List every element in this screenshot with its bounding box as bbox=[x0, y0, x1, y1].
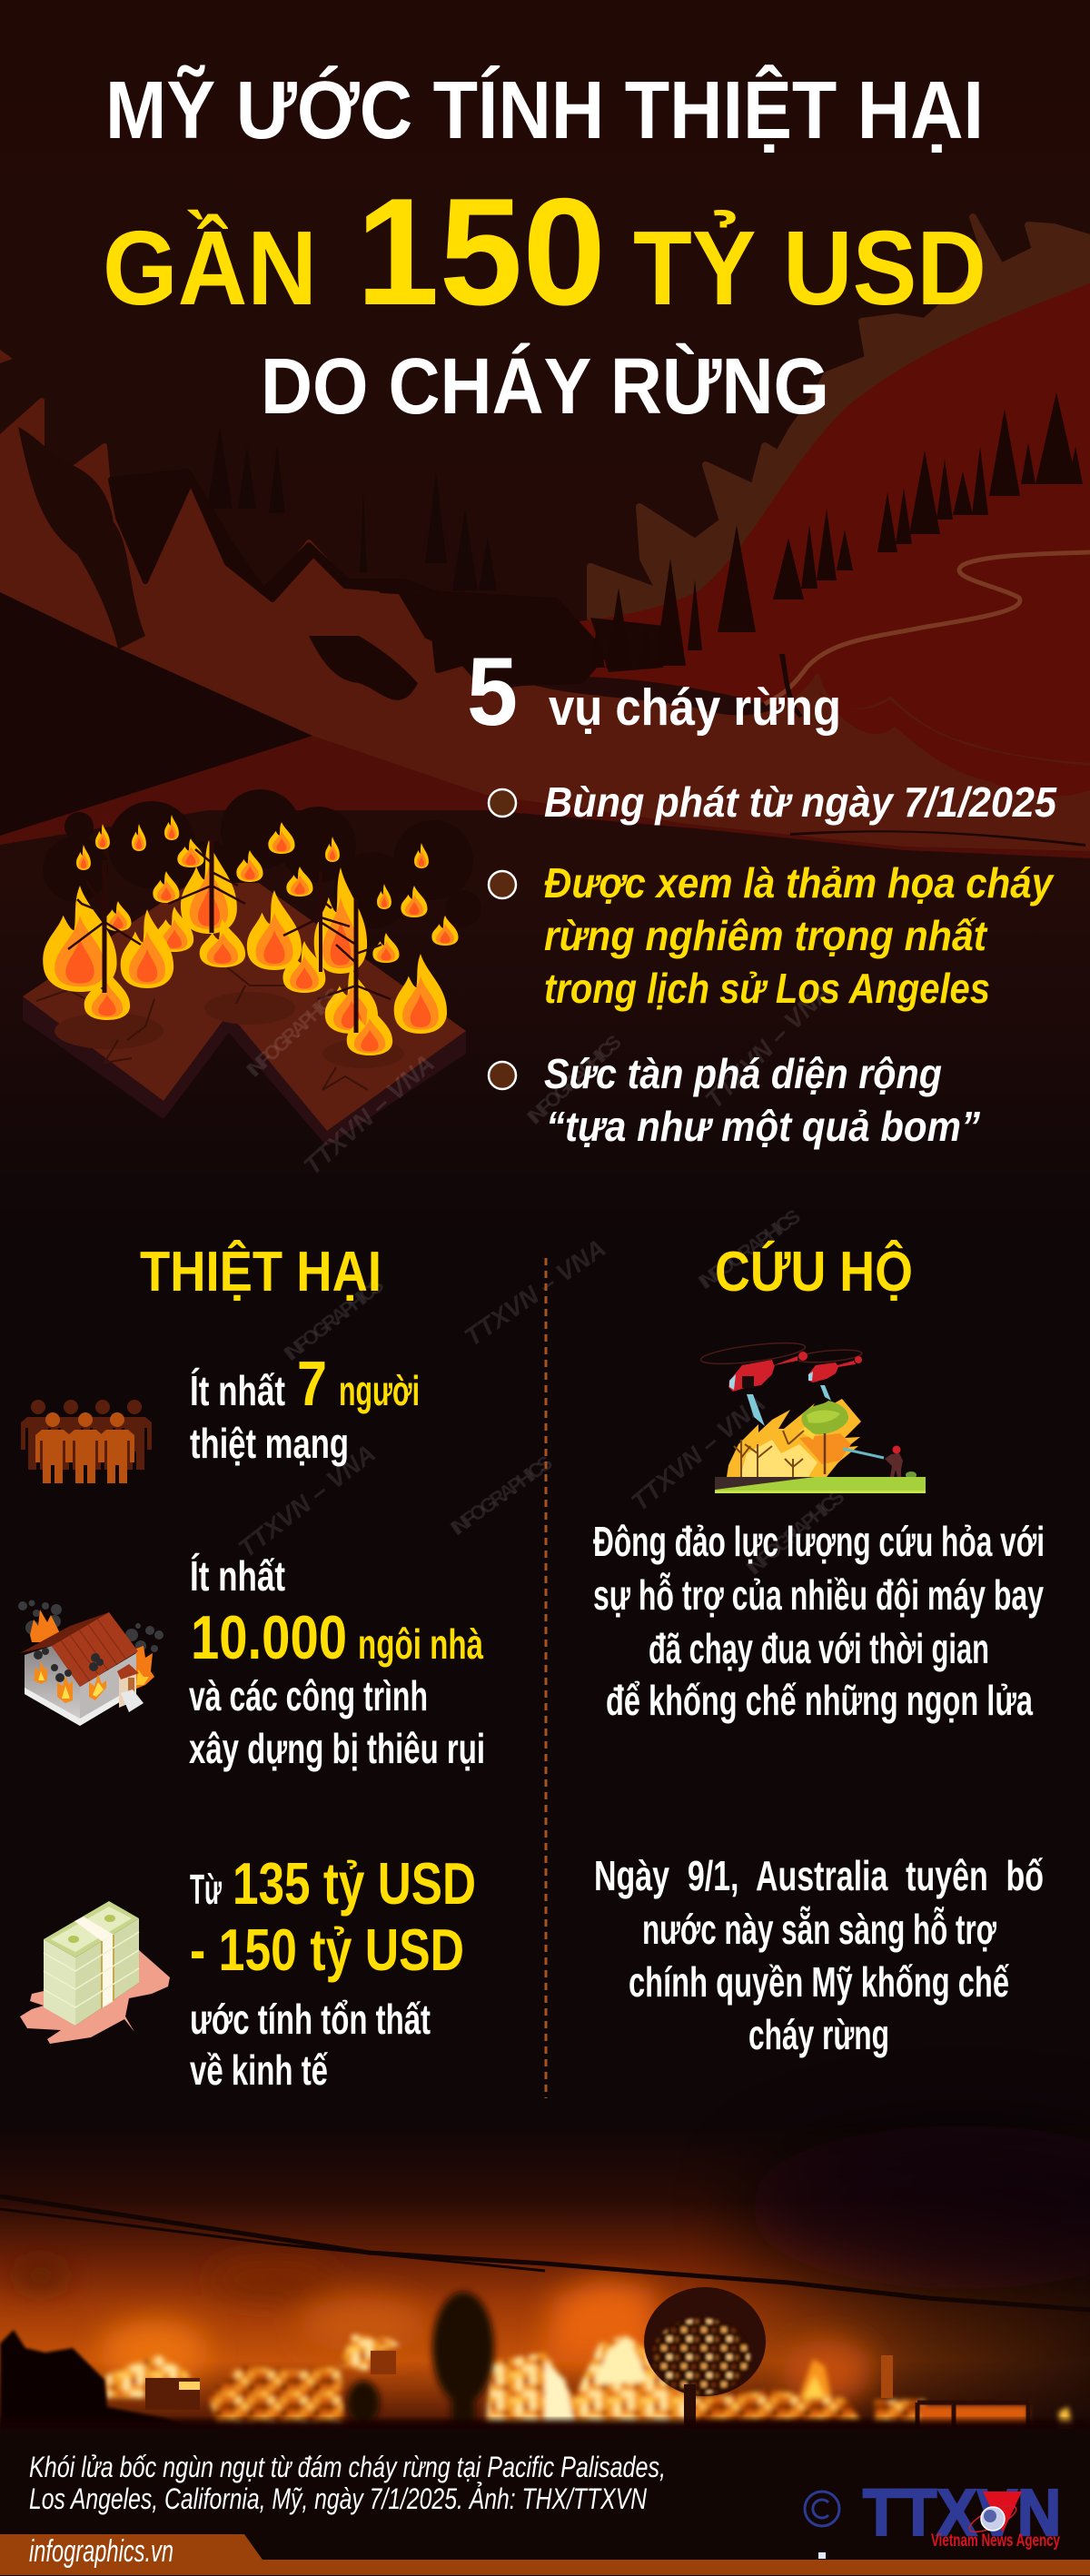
smoke bbox=[18, 1600, 164, 1652]
steps bbox=[121, 1689, 144, 1712]
loose smoke specks bbox=[779, 654, 1085, 847]
text: Australia support: cháy rừng bbox=[748, 2011, 889, 2058]
stack top bbox=[44, 1901, 139, 1957]
illustration: burning hills background bbox=[0, 217, 1090, 858]
heading: rescue: CỨU HỘ bbox=[715, 1241, 913, 1303]
dark red lower band bbox=[0, 736, 1090, 858]
watermarks bbox=[233, 977, 848, 1580]
photo caption bbox=[29, 2451, 666, 2515]
watermarks: TTXVN – VNA bbox=[626, 1389, 770, 1517]
stat: deaths: người bbox=[339, 1367, 420, 1414]
plinth bbox=[25, 1686, 136, 1726]
fire bbox=[727, 1399, 861, 1477]
text: Australia support bbox=[594, 1852, 1044, 2058]
watermarks: INFOGRAPHICS bbox=[694, 1204, 805, 1293]
bullet list: Được xem là thảm họa cháy bbox=[544, 859, 1055, 907]
title: 150 bbox=[356, 166, 606, 337]
stat: deaths: thiệt mạng bbox=[190, 1420, 349, 1467]
tree silhouettes bbox=[347, 2292, 494, 2427]
footer bar bbox=[0, 2534, 1090, 2575]
photo caption: Khói lửa bốc ngùn ngụt từ đám cháy rừng tại Pacific Palisades, bbox=[29, 2451, 666, 2483]
smoke over wall bbox=[34, 1648, 104, 1682]
porch bbox=[119, 1669, 136, 1708]
window flames bbox=[34, 1661, 47, 1684]
title: TỶ USD bbox=[633, 209, 986, 327]
river bbox=[765, 552, 1090, 704]
stat: deaths bbox=[190, 1348, 420, 1467]
heading: 5 wildfires bbox=[467, 637, 841, 746]
watermarks: TTXVN – VNA bbox=[233, 1439, 381, 1563]
bullet list: trong lịch sử Los Angeles bbox=[544, 965, 990, 1012]
dark ridge under the smoke bbox=[382, 590, 605, 689]
flames bbox=[43, 815, 459, 1055]
heading: 5 wildfires: 5 bbox=[467, 637, 518, 746]
ground shadows and cracks bbox=[36, 967, 404, 1090]
stat: homes: và các công trình bbox=[189, 1672, 428, 1719]
helicopter 1 bbox=[728, 1356, 798, 1392]
watermarks: TTXVN – VNA bbox=[298, 1049, 440, 1180]
small flame tip at left edge bbox=[0, 350, 13, 363]
stat: homes: ngôi nhà bbox=[358, 1620, 483, 1668]
title: MỸ ƯỚC TÍNH THIỆT HẠI bbox=[105, 64, 984, 156]
stat: economic loss: ước tính tổn thất bbox=[190, 1996, 431, 2043]
footer site name: infographics.vn bbox=[29, 2534, 173, 2569]
water drops bbox=[747, 1394, 765, 1426]
stat: economic loss: Từ bbox=[190, 1866, 222, 1913]
helicopter 2 bbox=[808, 1361, 856, 1382]
front roof bbox=[52, 1612, 138, 1687]
illustration: burning forest on cracked ground bbox=[23, 789, 481, 1146]
hand bbox=[20, 1950, 170, 2044]
stat: economic loss: - 150 tỷ USD bbox=[190, 1917, 464, 1983]
icon: money on hand bbox=[20, 1901, 170, 2044]
soft darkness at top right bbox=[745, 2125, 1090, 2289]
dark flame tongues on the left bbox=[18, 427, 145, 649]
watermarks: TTXVN – VNA bbox=[460, 1234, 611, 1352]
stat: economic loss: 135 tỷ USD bbox=[233, 1850, 476, 1917]
stat: homes: 10.000 bbox=[191, 1603, 347, 1672]
canopy smoke bbox=[43, 789, 481, 928]
rotor blades bbox=[699, 1339, 862, 1368]
bush bbox=[906, 1471, 917, 1479]
icon: burning house bbox=[18, 1600, 164, 1726]
left tree line bbox=[0, 2330, 209, 2434]
bullet list bbox=[489, 778, 1057, 1150]
hose bbox=[843, 1449, 884, 1458]
large tree bbox=[644, 2287, 766, 2428]
ground side bbox=[23, 996, 466, 1146]
scorched orange hillside behind smoke bbox=[590, 217, 1090, 654]
stat: economic loss: về kinh tế bbox=[190, 2046, 328, 2094]
stat: economic loss bbox=[190, 1850, 476, 2094]
watermarks: INFOGRAPHICS bbox=[742, 1485, 848, 1580]
icon: helicopters fighting a forest fire bbox=[699, 1339, 926, 1493]
photo caption: Los Angeles, California, Mỹ, ngày 7/1/2025. Ảnh: THX/TTXVN bbox=[29, 2482, 648, 2515]
right wall bbox=[80, 1653, 136, 1726]
bullet list: rừng nghiêm trọng nhất bbox=[544, 912, 988, 959]
title: DO CHÁY RỪNG bbox=[261, 342, 829, 431]
burnt trees bbox=[734, 1431, 804, 1477]
paper band bbox=[74, 1917, 114, 1941]
bullet list: Bùng phát từ ngày 7/1/2025 bbox=[544, 778, 1057, 826]
green tree bbox=[801, 1401, 848, 1434]
glow and smoke bbox=[14, 2260, 872, 2402]
left wall bbox=[25, 1646, 80, 1726]
watermarks: INFOGRAPHICS bbox=[242, 983, 345, 1082]
flames behind bbox=[30, 1610, 60, 1642]
dim trees on dark hill bbox=[207, 427, 497, 590]
power lines bbox=[0, 2196, 1090, 2310]
brighter flame edge on right of band bbox=[818, 690, 1090, 797]
chimney and dark frames bbox=[145, 2351, 1028, 2427]
heading: 5 wildfires: vụ cháy rừng bbox=[549, 679, 841, 737]
text: firefighters bbox=[593, 1518, 1045, 1724]
dark wedge bbox=[0, 592, 312, 836]
icon: people bbox=[21, 1400, 152, 1483]
stat: deaths: 7 bbox=[297, 1348, 327, 1419]
logo: TTXVN: TTXVN bbox=[863, 2477, 1061, 2550]
fires bbox=[106, 2334, 1074, 2434]
bullet list: Sức tàn phá diện rộng bbox=[544, 1050, 942, 1097]
title bbox=[103, 64, 986, 431]
ground top bbox=[23, 883, 466, 1131]
pine trees bbox=[590, 392, 1083, 668]
watermarks: INFOGRAPHICS bbox=[280, 1273, 388, 1365]
stat: homes: Ít nhất bbox=[190, 1552, 285, 1600]
watermarks: INFOGRAPHICS bbox=[446, 1451, 557, 1540]
stat: homes: xây dựng bị thiêu rụi bbox=[189, 1725, 485, 1772]
back roof bbox=[20, 1612, 109, 1653]
red hill bbox=[486, 283, 1090, 772]
heading: damage: THIỆT HẠI bbox=[140, 1241, 382, 1303]
small light bbox=[818, 2552, 826, 2559]
photo: burning houses at night bbox=[0, 2125, 1090, 2576]
title: GẦN bbox=[103, 209, 317, 327]
ground bbox=[715, 1477, 926, 1493]
foreground shadow bbox=[0, 2420, 1090, 2576]
firefighter bbox=[885, 1453, 903, 1477]
burnt trees bbox=[68, 840, 391, 1033]
stat: homes bbox=[189, 1552, 485, 1772]
stack left side bbox=[44, 1939, 75, 2026]
watermarks: TTXVN – VNA bbox=[699, 977, 837, 1114]
bullet list: “tựa như một quả bom” bbox=[546, 1103, 980, 1150]
stack right side bbox=[75, 1918, 139, 2026]
watermarks: INFOGRAPHICS bbox=[522, 1030, 626, 1129]
brown flame band bbox=[0, 401, 1090, 851]
column divider bbox=[545, 1258, 547, 2098]
stat: deaths: Ít nhất bbox=[190, 1367, 285, 1414]
